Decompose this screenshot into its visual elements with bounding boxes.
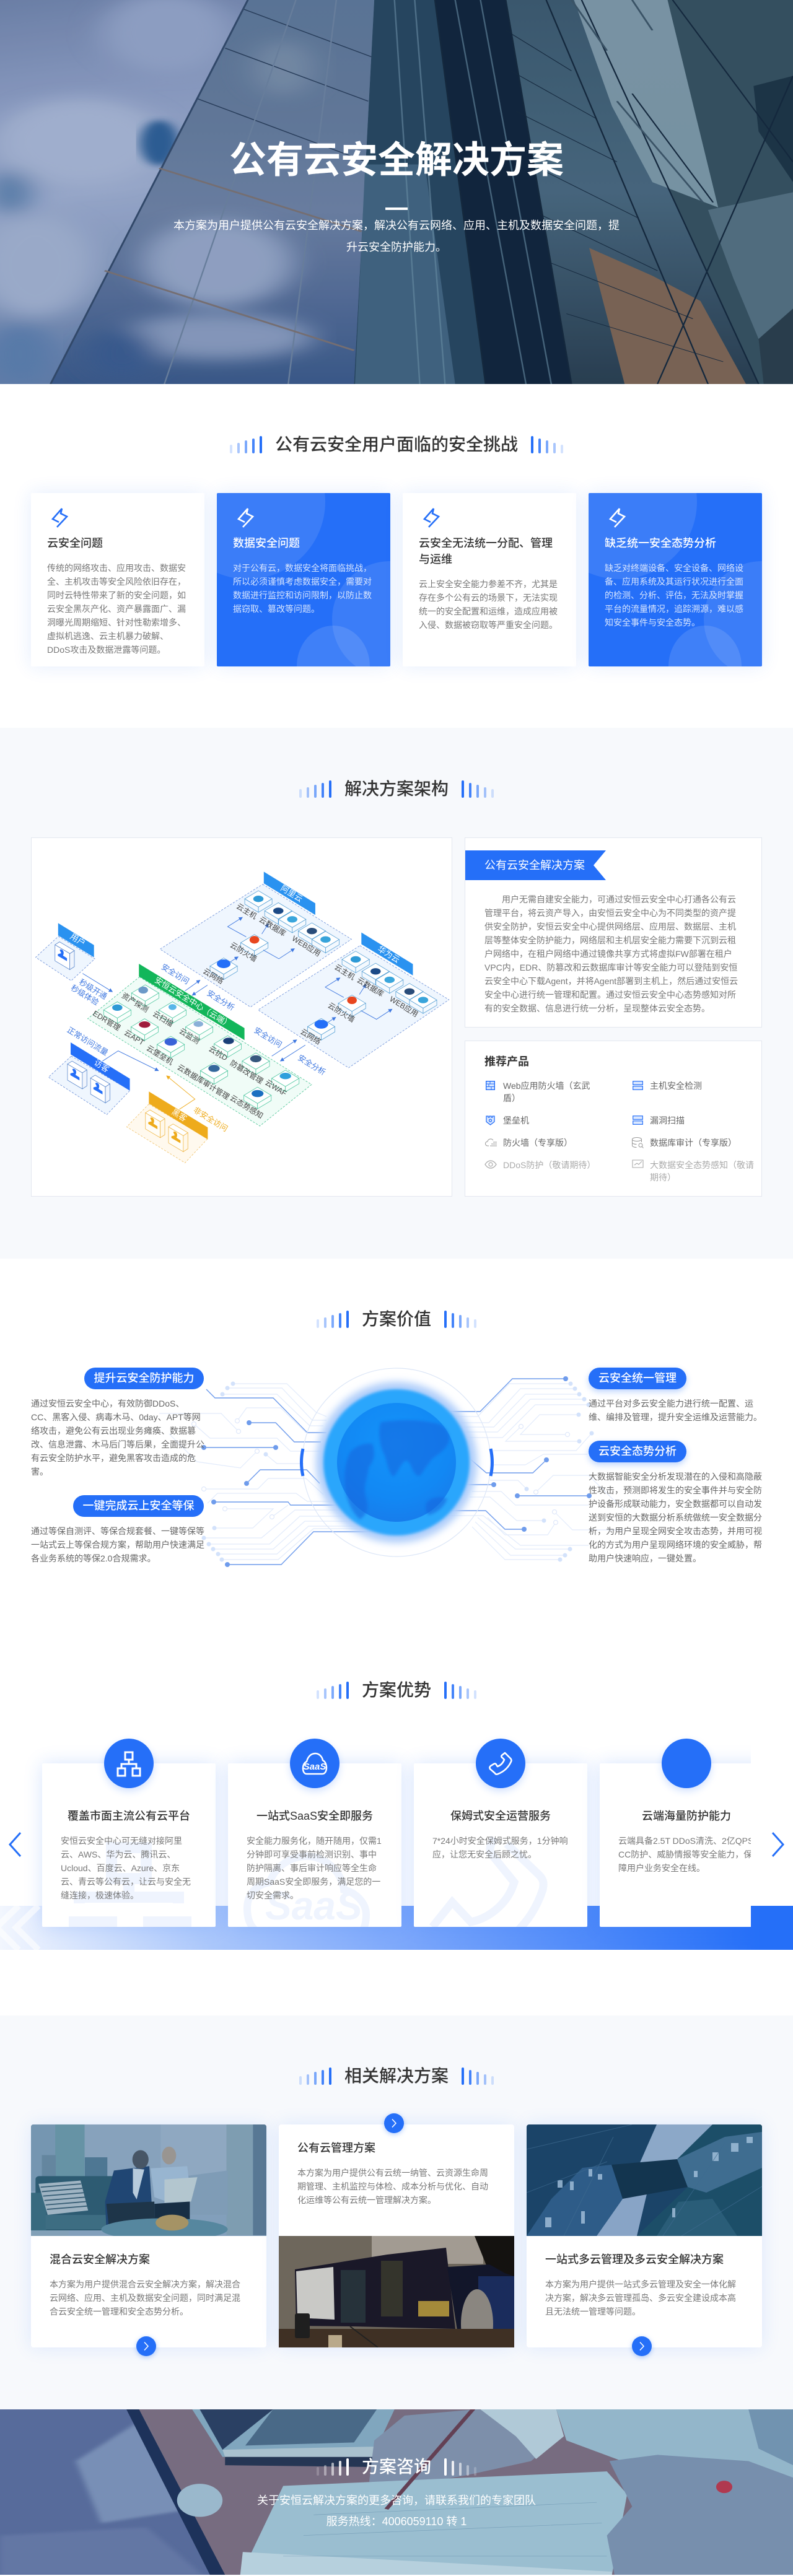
footer text and hotline xyxy=(0,2490,793,2532)
button: arrow xyxy=(136,2336,156,2356)
product: WAF: 盾） xyxy=(503,1093,520,1103)
decorative circles xyxy=(589,493,762,666)
zone: hacker: 黑客 xyxy=(170,1107,188,1124)
watermark: phone xyxy=(429,1836,548,1927)
product: vulnerability scan: 漏洞扫描 xyxy=(650,1116,685,1125)
text: unified management xyxy=(589,1399,762,1422)
zone: security center: 防篡改管理 xyxy=(229,1058,265,1086)
card: cloud security: 同时云特性带来了新的安全问题，如 xyxy=(47,590,186,600)
zone: Huawei Cloud: 云数据库 xyxy=(356,975,385,998)
text: unified management: 维、编排及管理，提升安全运维及运营能力。 xyxy=(589,1412,762,1422)
zone: Alibaba Cloud: 云网络 xyxy=(201,966,226,986)
card: multi-cloud: 本方案为用户提供一站式多云管理及安全一体化解 xyxy=(545,2279,736,2289)
arrow: next xyxy=(771,1832,784,1857)
zone: Huawei Cloud: 云主机 xyxy=(333,963,356,982)
card: cloud management: 化运维等公有云统一管理解决方案。 xyxy=(297,2195,436,2205)
text: protection capability: 通过安恒云安全中心，有效防御DDoS、 xyxy=(31,1399,184,1408)
photo: monitors xyxy=(279,2236,514,2347)
hero divider xyxy=(385,207,408,210)
card: SaaS: 防护隔离、事后审计响应等全生命 xyxy=(247,1863,377,1873)
hero banner xyxy=(0,0,793,384)
text: situation analysis: 送到安恒的大数据分析系统做统一安全数据分 xyxy=(589,1513,762,1522)
card: managed service xyxy=(414,1763,587,1927)
card: cloud security: 全、主机攻击等安全风险依旧存在， xyxy=(47,577,186,587)
icon: blank circle xyxy=(662,1739,711,1788)
description text: 用户无需自建安全能力，可通过安恒云安全中心打通各公有云 xyxy=(502,894,736,904)
zone: security center xyxy=(88,964,312,1126)
flow arrows and labels: 安全访问 xyxy=(160,962,191,986)
card: SaaS: 一站式SaaS安全即服务 xyxy=(256,1810,373,1822)
facade xyxy=(51,0,374,384)
card: cloud security: 虚拟机逃逸、云主机暴力破解、 xyxy=(47,631,169,641)
section heading xyxy=(317,1680,476,1700)
card: unified management xyxy=(403,493,576,666)
card: platform coverage: 缝连接，极速体验。 xyxy=(61,1890,139,1900)
zone: Huawei Cloud xyxy=(258,933,449,1068)
card: multi-cloud: 且无法统一管理等问题。 xyxy=(545,2307,641,2316)
card: cloud security xyxy=(31,493,204,666)
zone: security center: 云APT xyxy=(123,1028,146,1047)
card: data security: 数据安全问题 xyxy=(233,537,300,549)
zone: security center: 云态势感知 xyxy=(229,1093,265,1120)
circuit lines and globe xyxy=(159,1368,624,1567)
mid bands xyxy=(354,0,486,384)
zone: Huawei Cloud: 云网络 xyxy=(299,1026,323,1046)
section heading xyxy=(299,779,494,798)
card: SaaS xyxy=(228,1763,401,1927)
section: security challenges xyxy=(0,384,793,728)
description text: 有的安全数据、信息进行统一分析，呈现整体云安全态势。 xyxy=(484,1003,710,1013)
card: situational analysis: 缺乏统一安全态势分析 xyxy=(605,537,716,549)
text: situation analysis: 助用户快速响应，一键处置。 xyxy=(589,1553,701,1563)
button: arrow xyxy=(384,2113,404,2133)
slider viewport xyxy=(35,1739,751,1934)
text: unified management: 通过平台对多云安全能力进行统一配置、运 xyxy=(589,1399,753,1408)
hero subtitle: 本方案为用户提供公有云安全解决方案，解决公有云网络、应用、主机及数据安全问题，提 xyxy=(173,219,620,232)
flow arrows and labels xyxy=(66,962,327,1133)
card: cloud security: 云安全黑灰产化、资产暴露面广、漏 xyxy=(47,604,186,614)
zone: visitor: 访客 xyxy=(92,1058,111,1074)
card: cloud management: 期管理、主机监控与体检、成本分析与优化、自动 xyxy=(297,2181,488,2191)
flow arrows and labels: 正常访问流量 xyxy=(66,1026,110,1057)
text: situation analysis: 化的方式为用户呈现网络环境的安全威胁，帮 xyxy=(589,1540,762,1550)
zone: Alibaba Cloud xyxy=(160,871,351,1007)
card: managed service: 保姆式安全运营服务 xyxy=(450,1810,551,1822)
card: managed service: 应，让您无安全后顾之忧。 xyxy=(432,1849,537,1859)
section heading: 方案价值 xyxy=(362,1309,431,1329)
card: situational analysis: 平台的流量情况，追踪溯源，难以感 xyxy=(605,604,743,614)
footer: consultation xyxy=(0,2409,793,2575)
card: cloud security: 洞曝光周期缩短、针对性勒索增多、 xyxy=(47,618,186,627)
card: multi-cloud: 决方案，解决多云管理孤岛、多云安全建设成本高 xyxy=(545,2293,736,2303)
card: SaaS: 切安全需求。 xyxy=(247,1890,299,1900)
icon: lightning xyxy=(51,508,68,528)
card: platform coverage: 覆盖市面主流公有云平台 xyxy=(68,1810,190,1822)
card: multi-cloud xyxy=(527,2124,762,2347)
decorative circles xyxy=(217,493,390,666)
card: data security: 数据进行监控和访问限制，以防止数 xyxy=(233,590,372,600)
description text xyxy=(484,894,738,1013)
product: big data: 大数据安全态势感知（敬请 xyxy=(650,1160,754,1170)
panel: solution description xyxy=(465,837,762,1028)
hero title: 公有云安全解决方案 xyxy=(229,139,564,181)
text: situation analysis xyxy=(589,1472,762,1563)
pill: situation analysis xyxy=(589,1441,686,1462)
panel: architecture diagram xyxy=(31,837,452,1197)
card: data security: 对于公有云，数据安全将面临挑战， xyxy=(233,563,372,573)
card: unified management: 云上安全安全能力参差不齐，尤其是 xyxy=(419,579,558,589)
zone: security center: 云抗D xyxy=(208,1044,229,1063)
card: hybrid cloud: 云网络、应用、主机及数据安全问题，同时满足混 xyxy=(50,2293,240,2303)
card: mass protection: 障用户业务安全在线。 xyxy=(618,1863,705,1873)
section heading: 方案优势 xyxy=(362,1680,431,1700)
zone: Huawei Cloud: 华为云 xyxy=(376,944,401,964)
arrow: previous xyxy=(9,1832,22,1857)
icon: lightning xyxy=(237,508,254,528)
ribbon heading xyxy=(465,850,606,880)
zone: Alibaba Cloud: 云数据库 xyxy=(258,914,287,938)
section: solution architecture xyxy=(31,780,762,1197)
zone: Alibaba Cloud: 云防火墙 xyxy=(229,940,258,964)
flow arrows and labels: 秒级开通 xyxy=(77,977,108,1002)
watermark: network xyxy=(69,1842,191,1927)
card: hybrid cloud: 本方案为用户提供混合云安全解决方案，解决混合 xyxy=(50,2279,240,2289)
product: big data: 期待） xyxy=(650,1172,676,1182)
card: situational analysis: 备、应用系统及其运行状况进行全面 xyxy=(605,577,743,587)
card: cloud security: DDoS攻击及数据泄露等问题。 xyxy=(47,645,165,655)
section heading xyxy=(317,1309,476,1329)
product: bastion xyxy=(486,1116,529,1125)
footer text and hotline: 服务热线：4006059110 转 1 xyxy=(326,2515,467,2528)
card: cloud management: 本方案为用户提供公有云统一纳管、云资源生命周 xyxy=(297,2168,488,2178)
description text: 供安全防护，安恒云安全中心提供网络层、应用层、数据层、主机 xyxy=(484,922,736,932)
card: hybrid cloud: 混合云安全解决方案 xyxy=(50,2253,150,2266)
icon: lightning xyxy=(423,508,440,528)
zone: Huawei Cloud: 云防火墙 xyxy=(326,1000,356,1024)
card: multi-cloud: 一站式多云管理及多云安全解决方案 xyxy=(545,2253,724,2266)
text: protection capability: CC、黑客入侵、病毒木马、0day、APT等网 xyxy=(31,1412,201,1422)
text: compliance xyxy=(31,1526,204,1563)
pill: unified management: 云安全统一管理 xyxy=(598,1372,677,1384)
photo: meeting on sofa xyxy=(31,2124,266,2236)
text: situation analysis: 护设备形成联动能力，安全数据都可以自动发 xyxy=(589,1499,762,1509)
text: compliance: 各业务系统的等保2.0合规需求。 xyxy=(31,1553,156,1563)
bracket arcs xyxy=(301,1449,303,1476)
description text: 户网络中，在租户网络中通过镜像共享方式将虚拟FW部署在租户 xyxy=(484,949,732,959)
flow arrows and labels: 安全访问 xyxy=(253,1025,284,1049)
zone: security center: 资产探测 xyxy=(120,991,150,1014)
zone: security center: 云WAF xyxy=(263,1078,288,1098)
description text: 安全中心进行统一管理和配置。通过安恒云安全中心态势感知对所 xyxy=(484,990,736,1000)
watermark: SaaS cloud: SaaS xyxy=(265,1884,362,1927)
zone: visitor xyxy=(48,1042,130,1115)
section heading: 相关解决方案 xyxy=(344,2066,449,2085)
pill: protection capability: 提升云安全防护能力 xyxy=(94,1372,195,1384)
card: unified management: 云安全无法统一分配、管理 xyxy=(419,537,553,549)
card: mass protection: 云端具备2.5T DDoS清洗、2亿QPS xyxy=(618,1836,751,1846)
pill: unified management xyxy=(589,1368,686,1389)
section: solution value xyxy=(0,1259,793,1635)
card: SaaS: 安全能力服务化，随开随用，仅需1 xyxy=(247,1836,382,1846)
icon: SaaS: SaaS xyxy=(304,1762,326,1772)
card: unified management: 与运维 xyxy=(419,553,452,565)
watermark: SaaS cloud xyxy=(243,1853,370,1927)
zone: Alibaba Cloud: 云主机 xyxy=(235,902,258,921)
hero subtitle: 升云安全防护能力。 xyxy=(346,241,447,253)
products heading: 推荐产品 xyxy=(484,1055,529,1068)
card: mass protection xyxy=(600,1763,773,1927)
card: data security: 所以必须谨慎考虑数据安全，需要对 xyxy=(233,577,372,587)
zone: security center: EDR管理 xyxy=(92,1008,122,1033)
card: data security xyxy=(217,493,390,666)
zone: Huawei Cloud: WEB应用 xyxy=(388,994,420,1019)
icon: lightning xyxy=(609,508,626,528)
product: vulnerability scan xyxy=(633,1116,685,1125)
pill: protection capability xyxy=(84,1368,204,1389)
card: platform coverage: Ucloud、百度云、Azure、京东 xyxy=(61,1863,180,1873)
text: protection capability: 改、信息泄露、木马后门等后果，全面提升公 xyxy=(31,1439,204,1449)
footer text and hotline: 关于安恒云解决方案的更多咨询，请联系我们的专家团队 xyxy=(257,2494,536,2507)
text: situation analysis: 性攻击，预测即将发生的安全事件并与安全防 xyxy=(589,1485,762,1495)
flow arrows and labels: 安全分析 xyxy=(296,1053,327,1077)
hero photo: glass skyscraper xyxy=(0,0,793,384)
photo: looking up at towers xyxy=(527,2124,762,2236)
product: DDoS: DDoS防护（敬请期待） xyxy=(503,1160,595,1170)
card: hybrid cloud xyxy=(31,2124,266,2347)
card: unified management: 存在多个公有云的场景下，无法实现 xyxy=(419,593,558,603)
card: platform coverage: 云、青云等公有云，让云与安全无 xyxy=(61,1877,191,1887)
pill: situation analysis: 云安全态势分析 xyxy=(598,1445,677,1457)
footer heading: 方案咨询 xyxy=(362,2457,431,2476)
ribbon heading: 公有云安全解决方案 xyxy=(484,859,585,871)
isometric architecture diagram xyxy=(35,871,450,1163)
product: database audit: 数据库审计（专享版） xyxy=(650,1138,737,1148)
card: hybrid cloud: 合云安全统一管理和安全态势分析。 xyxy=(50,2307,188,2316)
card: platform coverage xyxy=(42,1763,216,1927)
watermark: chevrons on band xyxy=(3,1906,41,1950)
text: situation analysis: 析，为用户呈现全网安全攻击态势，并用可视 xyxy=(589,1526,762,1536)
card: SaaS: 周期SaaS安全即服务，满足您的一 xyxy=(247,1877,380,1887)
product: host detection: 主机安全检测 xyxy=(650,1081,702,1091)
product: big data xyxy=(632,1159,754,1182)
product: WAF xyxy=(486,1081,590,1103)
flow arrows and labels: 安全分析 xyxy=(205,988,237,1013)
card: mass protection: CC防护、威胁情报等安全能力，保 xyxy=(618,1849,751,1859)
section: solution advantages xyxy=(0,1635,793,2015)
card: cloud management: 公有云管理方案 xyxy=(297,2142,375,2154)
text: protection capability: 害。 xyxy=(31,1467,48,1477)
description text: 层等整体安全防护能力，网络层和主机层安全能力需要下沉到云租 xyxy=(484,935,736,945)
card: SaaS: 分钟即可享受事前检测识别、事中 xyxy=(247,1849,377,1859)
text: situation analysis: 大数据智能安全分析发现潜在的入侵和高隐蔽 xyxy=(589,1472,762,1482)
text: protection capability: 络攻击，避免公有云出现业务瘫痪、数据篡 xyxy=(31,1426,196,1436)
description text: 云安全中心下载Agent，并将Agent部署到主机上，然后通过安恒云 xyxy=(484,976,738,986)
product: WAF: Web应用防火墙（玄武 xyxy=(503,1081,590,1091)
text: protection capability xyxy=(31,1399,204,1477)
card: platform coverage: 云、AWS、华为云、腾讯云、 xyxy=(61,1849,175,1859)
icon: phone xyxy=(476,1739,525,1788)
zone: security center: 云扫描 xyxy=(151,1009,175,1029)
zone: security center: 云堡垒机 xyxy=(145,1043,175,1067)
card: unified management: 入侵、数据被窃取等严重安全问题。 xyxy=(419,620,558,630)
footer heading xyxy=(0,2453,793,2481)
button: arrow xyxy=(632,2336,652,2356)
card: situational analysis: 缺乏对终端设备、安全设备、网络设 xyxy=(605,563,743,573)
icon: SaaS xyxy=(290,1739,340,1788)
product: firewall: 防火墙（专享版） xyxy=(503,1138,572,1148)
hero subtitle xyxy=(173,219,620,253)
card: mass protection: 云端海量防护能力 xyxy=(642,1810,731,1822)
panel: recommended products xyxy=(465,1041,762,1197)
card: cloud security: 云安全问题 xyxy=(47,537,103,549)
card: cloud management xyxy=(279,2124,514,2347)
card: data security: 据窃取、篡改等问题。 xyxy=(233,604,320,614)
icon: network xyxy=(104,1739,154,1788)
section heading: 公有云安全用户面临的安全挑战 xyxy=(275,435,518,454)
pill: compliance xyxy=(73,1495,204,1517)
description text: VPC内，EDR、防篡改和云数据库审计等安全能力可以登陆到安恒 xyxy=(484,963,737,972)
flow arrows and labels: 秒级体验 xyxy=(69,983,100,1007)
card: situational analysis: 知安全事件与安全态势。 xyxy=(605,618,700,627)
zone: user: 用户 xyxy=(69,932,87,948)
zone: Alibaba Cloud: WEB应用 xyxy=(291,933,322,958)
card: situational analysis xyxy=(589,493,762,666)
zone: Alibaba Cloud: 阿里云 xyxy=(279,883,304,904)
card: managed service: 7*24小时安全保姆式服务，1分钟响 xyxy=(432,1836,568,1846)
flow arrows and labels: 非安全访问 xyxy=(192,1105,229,1133)
card: platform coverage: 安恒云安全中心可无缝对接阿里 xyxy=(61,1836,182,1846)
section: related solutions xyxy=(0,2015,793,2409)
text: compliance: 一站式云上等保合规方案，帮助用户快速满足 xyxy=(31,1540,204,1550)
pill: compliance: 一键完成云上安全等保 xyxy=(83,1500,195,1512)
zone: hacker xyxy=(126,1091,208,1163)
card: situational analysis: 的检测、分析、评估，无法及时掌握 xyxy=(605,590,743,600)
text: compliance: 通过等保自测评、等保合规套餐、一键等保等 xyxy=(31,1526,204,1536)
gradient band xyxy=(0,1906,793,1950)
zone: security center: 云数据库审计管理 xyxy=(176,1062,231,1101)
zone: security center: 云监测 xyxy=(178,1026,201,1046)
card: unified management: 统一的安全配置和运维，造成应用被 xyxy=(419,606,558,616)
text: protection capability: 有云安全防护水平，避免黑客攻击造成的危 xyxy=(31,1453,196,1463)
zone: security center: 安恒云安全中心（云端） xyxy=(153,975,233,1029)
product: bastion: 堡垒机 xyxy=(503,1116,529,1125)
section heading xyxy=(0,2063,793,2090)
zone: user xyxy=(36,923,95,980)
section heading: 解决方案架构 xyxy=(344,779,449,798)
description text: 管理平台，将云资产导入，由安恒云安全中心为不同类型的资产提 xyxy=(484,908,736,918)
photo: hands writing on paper xyxy=(0,2409,793,2575)
card: cloud security: 传统的网络攻击、应用攻击、数据安 xyxy=(47,563,186,573)
